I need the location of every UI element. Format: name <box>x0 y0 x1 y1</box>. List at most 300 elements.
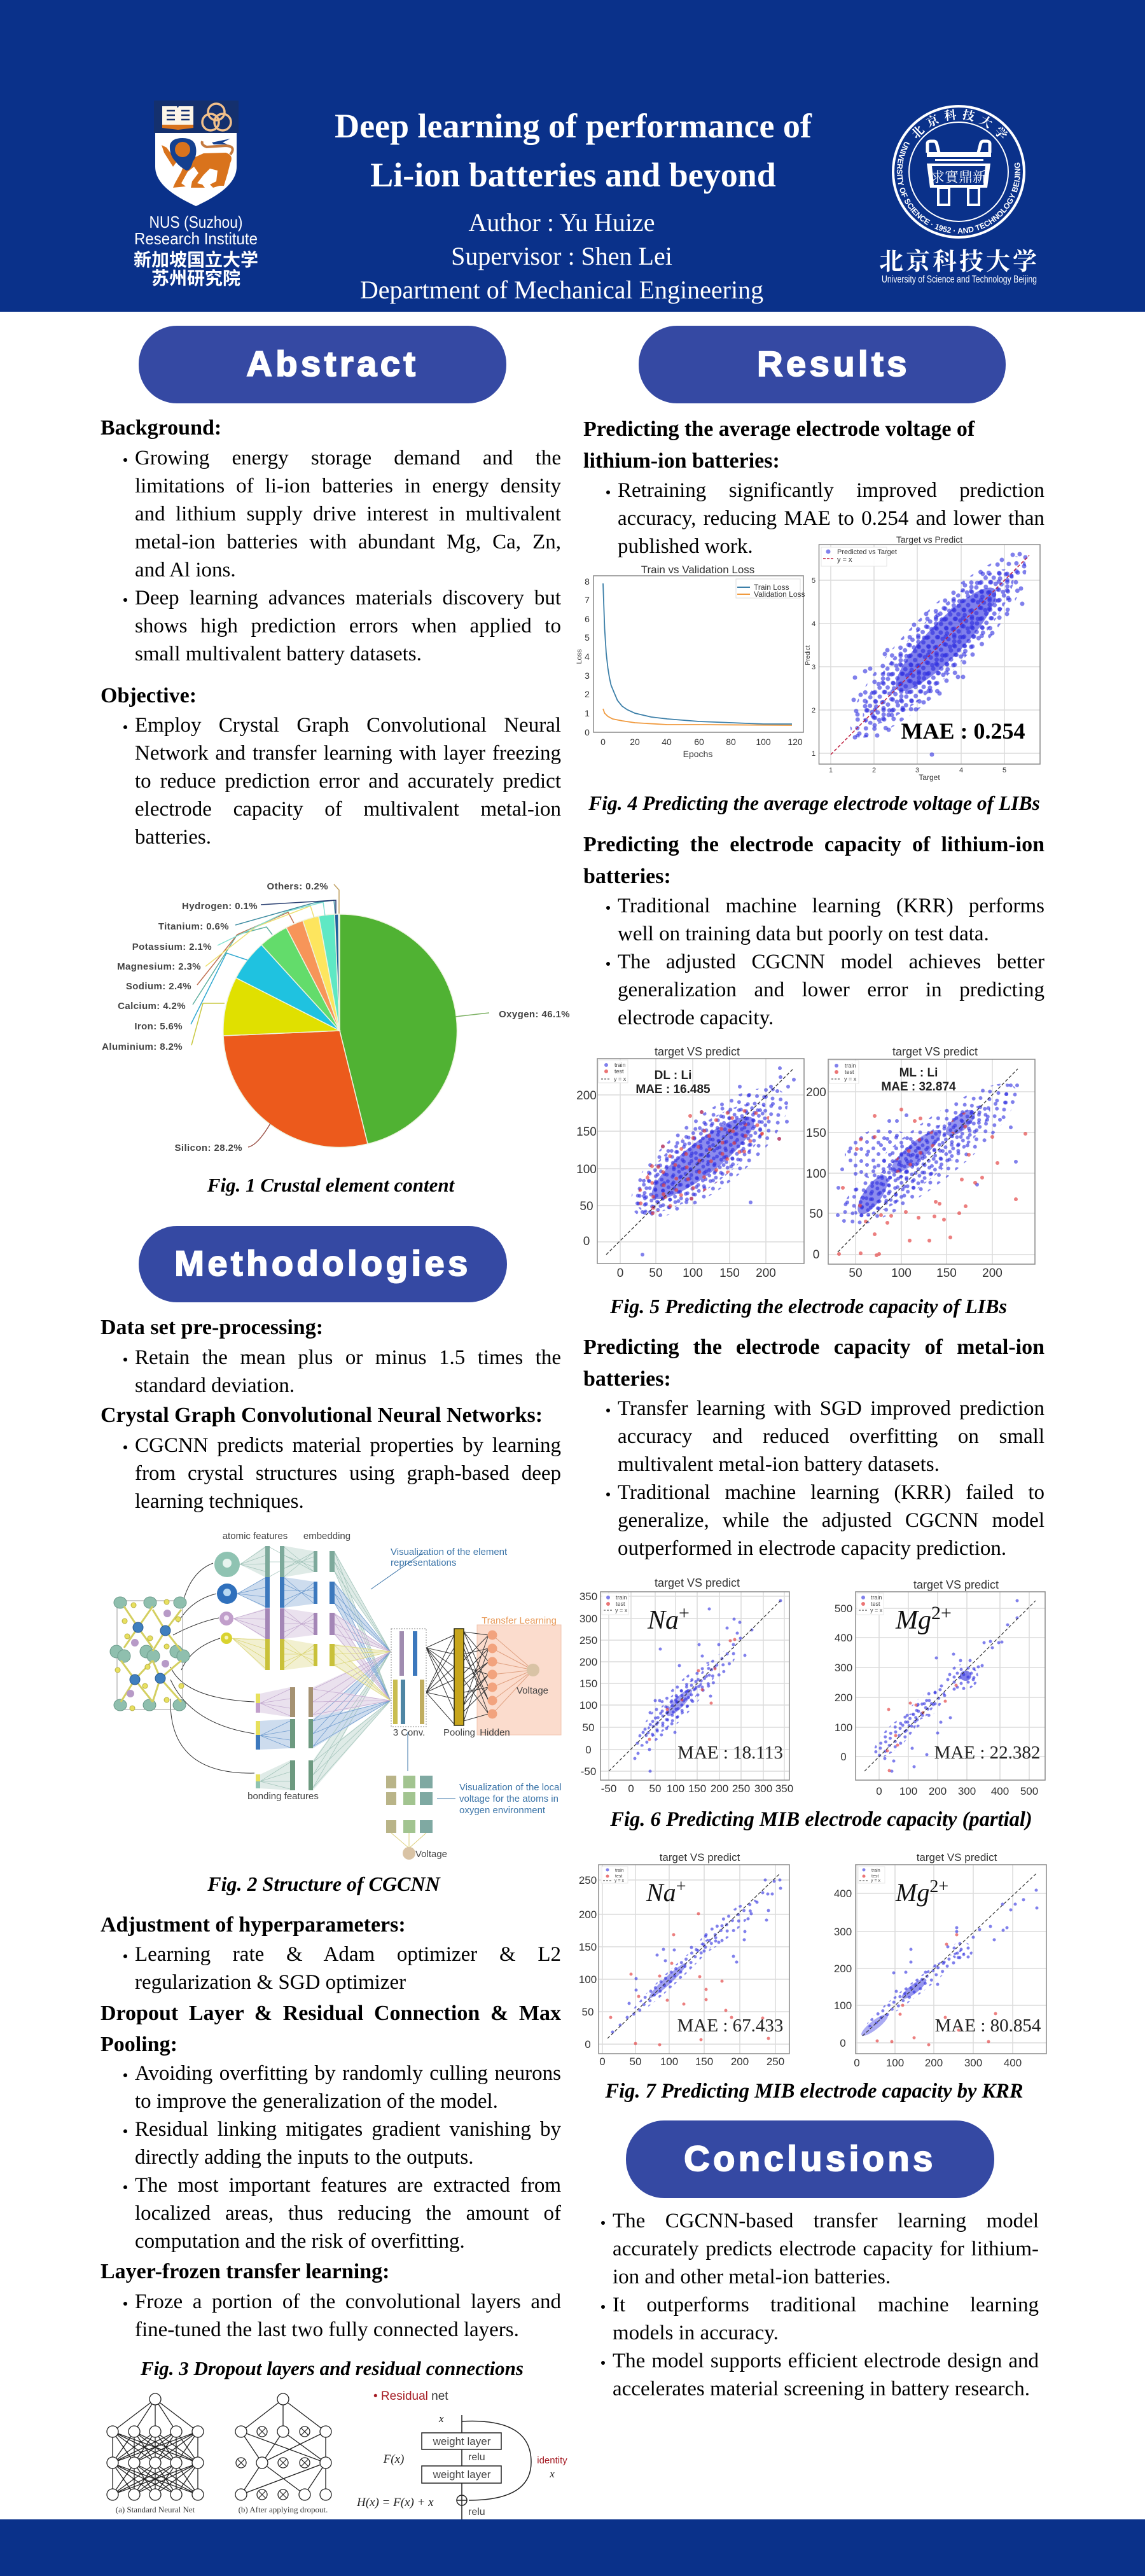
scatter chart: Mg2+: 500 <box>1020 1785 1038 1797</box>
USTB seal logo: 北京科技大学 <box>912 108 1008 139</box>
heading: conclusions: Conclusions <box>684 2138 936 2178</box>
scatter chart: DL Li: target VS predict <box>655 1045 740 1058</box>
USTB seal logo <box>892 105 1025 239</box>
scatter chart: DL Li <box>576 1045 807 1280</box>
diagram: CGCNN structure: bonding features <box>247 1791 319 1802</box>
line chart: train vs validation loss: 120 <box>788 737 803 747</box>
scatter chart: ML Li: 100 <box>891 1267 912 1280</box>
text: hyperparameters bullet: Learning rate & Adam optimizer & L2 <box>135 1943 561 1966</box>
text: capacity LIB bullets <box>618 892 1044 1032</box>
scatter chart: DL Li: test <box>614 1068 624 1075</box>
scatter chart: DL Li: 0 <box>583 1235 590 1248</box>
text: capacity MIB bullets: generalize, while the adjusted CGCNN model <box>618 1509 1044 1532</box>
diagram: CGCNN structure: oxygen environment <box>459 1805 546 1816</box>
scatter chart: DL Li: 200 <box>576 1089 597 1103</box>
text: conclusions bullets: models in accuracy. <box>613 2322 779 2344</box>
scatter chart: Mg2+: 400 <box>835 1632 852 1644</box>
text: conclusions bullets: accurately predicts electrode capacity for lithium- <box>613 2238 1039 2260</box>
diagram: CGCNN structure: Transfer Learning <box>482 1615 557 1626</box>
NUS institute name: NUS (Suzhou) <box>149 212 243 232</box>
scatter chart: ML Li: y = x <box>844 1076 857 1082</box>
line chart: train vs validation loss: 3 <box>585 671 590 681</box>
scatter chart: target vs predict, MAE 0.254: MAE : 0.254 <box>901 718 1025 744</box>
diagram: dropout and residual net: weight layer <box>433 2468 491 2481</box>
charts: fig 5 <box>572 1043 1056 1279</box>
scatter chart: Mg2+: 100 <box>899 1785 917 1797</box>
diagram: CGCNN structure: Voltage <box>517 1685 548 1696</box>
line chart: train vs validation loss: 40 <box>662 737 672 747</box>
title: Deep learning of performance of <box>335 107 812 145</box>
scatter chart: DL Li: 50 <box>649 1267 663 1280</box>
text: capacity LIB bullets: electrode capacity. <box>618 1006 774 1029</box>
title: Li-ion batteries and beyond <box>370 156 776 194</box>
text: pre-processing bullet: standard deviation. <box>135 1374 295 1397</box>
scatter chart: ML Li: ML : Li <box>899 1066 938 1080</box>
scatter chart: DL Li: 200 <box>756 1267 776 1280</box>
scatter chart: Na+: 150 <box>688 1783 706 1795</box>
diagram: dropout and residual net: x <box>549 2468 555 2480</box>
scatter chart: Na+: y = x <box>615 1607 628 1613</box>
pie chart: crustal element content: Magnesium: 2.3% <box>117 961 201 972</box>
text: dropout bullets: directly adding the inputs to the outputs. <box>135 2146 474 2169</box>
scatter chart: Mg2+: 400 <box>991 1785 1009 1797</box>
scatter chart: Na+: 350 <box>775 1783 793 1795</box>
pie chart: crustal element content <box>101 882 572 1155</box>
scatter chart: Mg2+: MAE : 22.382 <box>934 1743 1040 1763</box>
scatter chart: KRR Na+: 150 <box>695 2056 713 2068</box>
author block: Department of Mechanical Engineering <box>360 275 763 304</box>
scatter chart: ML Li: 100 <box>806 1167 826 1181</box>
text: transfer learning bullet: fine-tuned the last two fully connected layers. <box>135 2318 519 2341</box>
scatter chart: target vs predict, MAE 0.254: 1 <box>829 767 833 774</box>
scatter chart: KRR Na+: y = x <box>614 1879 624 1883</box>
text: background bullets: limitations of li-ion batteries in energy density <box>135 475 561 498</box>
NUS institute name: Research Institute <box>134 229 258 248</box>
panel: conclusions <box>572 2099 1056 2418</box>
scatter chart: Mg2+: 0 <box>840 1751 847 1763</box>
header band <box>0 0 1145 312</box>
scatter chart: Na+: 200 <box>579 1656 597 1668</box>
pie chart: crustal element content: Oxygen: 46.1% <box>499 1009 570 1020</box>
scatter chart: Mg2+: test <box>871 1601 880 1607</box>
scatter chart: Na+: target VS predict <box>655 1577 740 1589</box>
line chart: train vs validation loss: 8 <box>585 576 590 587</box>
text: background bullets: metal-ion batteries with abundant Mg, Ca, Zn, <box>135 531 561 553</box>
text: hyperparameters bullet: regularization & SGD optimizer <box>135 1971 406 1994</box>
pie chart: crustal element content: Sodium: 2.4% <box>126 981 191 992</box>
text: transfer learning bullet: Froze a portion of the convolutional layers and <box>135 2290 561 2313</box>
panel: methodologies <box>95 1209 572 2519</box>
caption: fig 3: Fig. 3 Dropout layers and residual connections <box>141 2357 524 2379</box>
subheading: electrode capacity LIB: batteries: <box>583 865 671 888</box>
text: hyperparameters bullet <box>135 1940 561 1996</box>
text: background bullets: and Al ions. <box>135 559 236 581</box>
scatter chart: ML Li: 200 <box>982 1267 1003 1280</box>
footer band <box>0 2519 1145 2576</box>
text: objective bullets: Employ Crystal Graph Convolutional Neural <box>135 714 561 737</box>
diagram: CGCNN structure <box>101 1527 572 1867</box>
text: background bullets: Deep learning advances materials discovery but <box>135 587 561 609</box>
scatter chart: Na+: -50 <box>601 1783 616 1795</box>
scatter chart: Na+: 150 <box>579 1678 597 1690</box>
charts: fig 7 <box>572 1848 1056 2068</box>
scatter chart: KRR Na+: 100 <box>660 2056 678 2068</box>
text: objective bullets: Network and transfer learning with layer freezing <box>135 742 561 765</box>
scatter chart: KRR Mg2+: 0 <box>840 2037 846 2049</box>
text: capacity MIB bullets: outperformed in electrode capacity prediction. <box>618 1537 1006 1560</box>
scatter chart: Mg2+: train <box>871 1594 882 1601</box>
scatter chart: KRR Na+: 50 <box>582 2006 593 2018</box>
text: background bullets: Growing energy storage demand and the <box>135 447 561 470</box>
subheading: electrode capacity MIB: batteries: <box>583 1367 671 1391</box>
text: capacity LIB bullets: Traditional machine learning (KRR) performs <box>618 895 1044 917</box>
pie chart: crustal element content: Calcium: 4.2% <box>118 1001 186 1012</box>
text: background bullets: small multivalent battery datasets. <box>135 643 422 665</box>
diagram: CGCNN structure: embedding <box>303 1531 350 1542</box>
line chart: train vs validation loss: 1 <box>585 708 590 718</box>
text: background bullets: shows high prediction errors when applied to <box>135 615 561 637</box>
caption: fig 1: Fig. 1 Crustal element content <box>207 1174 454 1196</box>
subheading: electrode voltage <box>583 414 975 477</box>
scatter chart: ML Li <box>806 1045 1035 1280</box>
scatter chart: KRR Na+: + <box>676 1877 686 1897</box>
text: capacity MIB bullets: accuracy and reduced overfitting on small <box>618 1425 1044 1448</box>
subheading: data set pre-processing: Data set pre-processing: <box>101 1316 323 1339</box>
text: voltage bullet: Retraining significantly improved prediction <box>618 479 1044 502</box>
subheading: background: Background: <box>101 416 221 440</box>
heading: results <box>639 326 1006 403</box>
scatter chart: Na+: MAE : 18.113 <box>677 1743 783 1763</box>
panel: abstract <box>95 318 572 1209</box>
author block: Author : Yu Huize <box>469 208 655 237</box>
scatter chart: KRR Na+: test <box>615 1874 622 1879</box>
line chart: train vs validation loss: 60 <box>694 737 704 747</box>
scatter chart: KRR Na+: train <box>615 1869 624 1873</box>
panel: results <box>572 318 1056 2099</box>
heading: conclusions <box>626 2120 994 2198</box>
text: capacity LIB bullets: well on training data but poorly on test data. <box>618 922 989 945</box>
NUS institute name <box>134 212 258 288</box>
scatter chart: Na+: 100 <box>667 1783 684 1795</box>
text: dropout bullets: localized areas, thus reducing the amount of <box>135 2202 561 2225</box>
scatter chart: ML Li: train <box>845 1062 856 1069</box>
line chart: train vs validation loss: Epochs <box>683 749 712 759</box>
text: objective bullets: batteries. <box>135 826 211 849</box>
scatter chart: ML Li: 50 <box>849 1267 863 1280</box>
line chart: train vs validation loss: Loss <box>576 649 583 664</box>
scatter chart: KRR Mg2+: test <box>871 1874 878 1879</box>
diagram: dropout and residual net: (b) After applying dropout. <box>239 2505 328 2514</box>
scatter chart: Na+: 350 <box>579 1591 597 1603</box>
subheading: objective: Objective: <box>101 684 197 707</box>
scatter chart: KRR Na+: MAE : 67.433 <box>677 2016 783 2036</box>
scatter chart: DL Li: 0 <box>617 1267 623 1280</box>
scatter chart: Na+: 300 <box>579 1613 597 1625</box>
diagram: CGCNN structure: voltage for the atoms in <box>459 1793 559 1804</box>
caption: fig 7: Fig. 7 Predicting MIB electrode capacity by KRR <box>605 2080 1024 2103</box>
scatter chart: Na+: 50 <box>649 1783 661 1795</box>
diagram: CGCNN structure: representations <box>391 1557 456 1568</box>
text: background bullets <box>135 444 561 668</box>
scatter chart: Mg2+: target VS predict <box>913 1578 999 1591</box>
scatter chart: KRR Na+: Na <box>646 1878 676 1907</box>
text: dropout bullets: Residual linking mitigates gradient vanishing by <box>135 2118 561 2141</box>
line chart: train vs validation loss: 20 <box>630 737 640 747</box>
text: objective bullets: to reduce prediction error and accurately predict <box>135 770 561 793</box>
scatter chart: target vs predict, MAE 0.254: Target vs Predict <box>896 534 962 545</box>
scatter chart: KRR Mg2+: target VS predict <box>917 1851 997 1863</box>
scatter chart: Na+: 0 <box>585 1744 592 1756</box>
line chart: train vs validation loss: 6 <box>585 614 590 624</box>
USTB name: 北京科技大学 <box>879 249 1039 275</box>
scatter chart: KRR Mg2+: 300 <box>834 1926 852 1938</box>
scatter chart: KRR Mg2+: 0 <box>854 2057 860 2069</box>
text: voltage bullet <box>618 477 1044 560</box>
scatter chart: KRR Na+: target VS predict <box>660 1851 740 1863</box>
scatter chart: ML Li: 150 <box>806 1127 826 1140</box>
line chart: train vs validation loss: 100 <box>756 737 771 747</box>
scatter chart: Mg2+: 300 <box>835 1662 852 1674</box>
subheading: dropout: Pooling: <box>101 2033 177 2056</box>
scatter chart: Mg2+: Mg <box>896 1606 931 1635</box>
text: voltage bullet: accuracy, reducing MAE to 0.254 and lower than <box>618 507 1044 530</box>
diagram: CGCNN structure: Hidden <box>480 1727 510 1738</box>
scatter chart: target vs predict, MAE 0.254: 4 <box>812 620 815 628</box>
pie chart: crustal element content: Titanium: 0.6% <box>158 921 229 932</box>
caption: fig 4: Fig. 4 Predicting the average electrode voltage of LIBs <box>588 792 1040 814</box>
diagram: dropout and residual net: identity <box>537 2455 567 2466</box>
scatter chart: KRR Mg2+: 300 <box>964 2057 982 2069</box>
heading: methodologies <box>139 1226 507 1302</box>
scatter chart: KRR Mg2+: y = x <box>871 1879 880 1883</box>
scatter chart: DL Li: 100 <box>576 1163 597 1176</box>
line chart: train vs validation loss: Train Loss <box>754 583 789 592</box>
line chart: train vs validation loss: 80 <box>726 737 736 747</box>
scatter chart: target vs predict, MAE 0.254: Target <box>919 773 940 782</box>
subheading: hyperparameters: Adjustment of hyperparameters: <box>101 1913 406 1937</box>
scatter chart: Na+: 0 <box>628 1783 634 1795</box>
diagram: dropout and residual net: H(x) = F(x) + x <box>356 2496 434 2509</box>
scatter chart: target vs predict, MAE 0.254: 1 <box>812 750 815 758</box>
scatter chart: Mg2+ <box>835 1578 1045 1797</box>
caption: fig 2: Fig. 2 Structure of CGCNN <box>207 1872 440 1895</box>
scatter chart: KRR Mg2+ <box>834 1851 1046 2069</box>
scatter chart: Na+: 100 <box>579 1699 597 1711</box>
text: dropout bullets: computation and the risk of overfitting. <box>135 2230 465 2253</box>
text: capacity LIB bullets: The adjusted CGCNN model achieves better <box>618 950 1044 973</box>
scatter chart: Na+: train <box>616 1594 627 1601</box>
text: dropout bullets: The most important features are extracted from <box>135 2174 561 2197</box>
text: conclusions bullets: The model supports efficient electrode design and <box>613 2350 1039 2372</box>
scatter chart: target vs predict, MAE 0.254: 2 <box>812 707 815 714</box>
subheading: electrode capacity LIB <box>583 829 1044 893</box>
scatter chart: KRR Mg2+: 200 <box>925 2057 943 2069</box>
heading: abstract: Abstract <box>246 344 419 383</box>
diagram: dropout and residual net: relu <box>468 2507 485 2517</box>
scatter chart: ML Li: 0 <box>813 1248 819 1262</box>
text: dropout bullets <box>135 2059 561 2255</box>
scatter chart: ML Li: 50 <box>809 1208 823 1221</box>
diagram: CGCNN structure: Visualization of the local <box>459 1782 562 1793</box>
text: pre-processing bullet: Retain the mean plus or minus 1.5 times the <box>135 1346 561 1369</box>
subheading: electrode capacity MIB <box>583 1332 1044 1395</box>
title <box>255 102 891 200</box>
text: objective bullets: electrode capacity of multivalent metal-ion <box>135 798 561 821</box>
scatter chart: Na+: + <box>679 1603 690 1624</box>
scatter chart: Na+: 200 <box>711 1783 728 1795</box>
scatter chart: KRR Mg2+: MAE : 80.854 <box>935 2016 1041 2036</box>
USTB seal logo: UNIVERSITY OF SCIENCE · 1952 · AND TECHNOLOGY BEIJING <box>897 142 1020 234</box>
scatter chart: KRR Mg2+: 100 <box>886 2057 904 2069</box>
scatter chart: DL Li: y = x <box>614 1076 627 1082</box>
scatter chart: KRR Mg2+: 100 <box>834 2000 852 2012</box>
scatter chart: DL Li: train <box>614 1062 626 1068</box>
scatter chart: DL Li: 100 <box>683 1267 703 1280</box>
subheading: dropout <box>101 1998 561 2060</box>
line chart: train vs validation loss: 4 <box>585 651 590 662</box>
scatter chart: target vs predict, MAE 0.254: Predict <box>805 645 812 665</box>
scatter chart: KRR Na+ <box>579 1851 789 2068</box>
scatter chart: Na+: 250 <box>732 1783 750 1795</box>
pie chart: crustal element content: Hydrogen: 0.1% <box>182 901 258 912</box>
scatter chart: Na+: 50 <box>583 1722 594 1734</box>
scatter chart: ML Li: test <box>845 1069 854 1075</box>
diagram: dropout and residual net: • Residual net <box>373 2390 448 2403</box>
scatter chart: Na+: -50 <box>581 1765 596 1778</box>
scatter chart: target vs predict, MAE 0.254: 5 <box>1003 767 1006 774</box>
scatter chart: target vs predict, MAE 0.254: 4 <box>959 767 963 774</box>
text: dropout bullets: to improve the generalization of the model. <box>135 2090 498 2113</box>
scatter chart: KRR Na+: 50 <box>630 2056 641 2068</box>
text: capacity MIB bullets: Transfer learning with SGD improved prediction <box>618 1397 1044 1420</box>
text: conclusions bullets: The CGCNN-based transfer learning model <box>613 2210 1039 2232</box>
heading: abstract <box>139 326 506 403</box>
line chart: train vs validation loss: 0 <box>600 737 606 747</box>
scatter chart: ML Li: 200 <box>806 1086 826 1099</box>
charts: fig 6 <box>572 1575 1056 1800</box>
text: CGCNN bullet <box>135 1431 561 1515</box>
scatter chart: target vs predict, MAE 0.254: Predicted vs Target <box>837 548 897 556</box>
line chart: train vs validation loss: Validation Loss <box>754 590 805 599</box>
scatter chart: DL Li: 50 <box>579 1200 593 1213</box>
scatter chart: Mg2+: 500 <box>835 1603 852 1615</box>
scatter chart: KRR Mg2+: train <box>871 1869 880 1873</box>
scatter chart: ML Li: MAE : 32.874 <box>881 1080 956 1094</box>
text: conclusions bullets <box>613 2207 1039 2403</box>
scatter chart: Na+: 300 <box>754 1783 772 1795</box>
scatter chart: KRR Mg2+: Mg <box>896 1878 929 1907</box>
scatter chart: Na+: Na <box>648 1606 679 1635</box>
scatter chart: Na+ <box>579 1577 793 1795</box>
USTB name: University of Science and Technology Beijing <box>882 274 1037 285</box>
USTB seal logo: 求實鼎新 <box>931 169 987 185</box>
caption: fig 6: Fig. 6 Predicting MIB electrode capacity (partial) <box>610 1808 1032 1831</box>
scatter chart: target vs predict, MAE 0.254: 3 <box>915 767 919 774</box>
diagram: CGCNN structure: Voltage <box>415 1849 447 1860</box>
subheading: transfer learning: Layer-frozen transfer learning: <box>101 2260 389 2283</box>
scatter chart: DL Li: 150 <box>576 1125 597 1139</box>
scatter chart: Na+: 250 <box>579 1634 597 1647</box>
subheading: electrode voltage: lithium-ion batteries: <box>583 449 780 473</box>
line chart: train vs validation loss <box>576 564 805 759</box>
text: conclusions bullets: ion and other metal-ion batteries. <box>613 2266 891 2288</box>
subheading: electrode voltage: Predicting the average electrode voltage of <box>583 417 975 441</box>
scatter chart: target vs predict, MAE 0.254 <box>805 534 1047 782</box>
subheading: dropout: Dropout Layer & Residual Connection & Max <box>101 2002 561 2025</box>
caption: fig 5: Fig. 5 Predicting the electrode capacity of LIBs <box>610 1295 1007 1318</box>
text: CGCNN bullet: learning techniques. <box>135 1490 304 1513</box>
NUS crest logo <box>134 101 1039 288</box>
scatter chart: KRR Na+: 200 <box>579 1909 597 1921</box>
scatter chart: ML Li: 150 <box>936 1267 957 1280</box>
scatter chart: Mg2+: 100 <box>835 1722 852 1734</box>
line chart: train vs validation loss: 7 <box>585 595 590 605</box>
line chart: train vs validation loss: Train vs Validation Loss <box>641 564 754 576</box>
scatter chart: KRR Na+: 250 <box>767 2056 784 2068</box>
diagram: dropout and residual net: x <box>438 2412 444 2425</box>
diagram: dropout and residual net: relu <box>468 2452 485 2463</box>
scatter chart: KRR Na+: 100 <box>579 1974 597 1986</box>
scatter chart: DL Li: DL : Li <box>655 1069 691 1082</box>
text: capacity MIB bullets: Traditional machine learning (KRR) failed to <box>618 1481 1044 1504</box>
scatter chart: KRR Na+: 250 <box>579 1874 597 1886</box>
diagram: dropout and residual net: (a) Standard Neural Net <box>116 2505 195 2514</box>
subheading: electrode capacity LIB: Predicting the electrode capacity of lithium-ion <box>583 833 1044 856</box>
text: capacity MIB bullets <box>618 1395 1044 1563</box>
scatter chart: KRR Mg2+: 200 <box>834 1963 852 1975</box>
scatter chart: KRR Mg2+: 400 <box>1004 2057 1022 2069</box>
scatter chart: KRR Na+: 200 <box>731 2056 749 2068</box>
scatter chart: KRR Na+: 0 <box>599 2056 606 2068</box>
line chart: train vs validation loss: 5 <box>585 632 590 643</box>
scatter chart: Mg2+: 200 <box>929 1785 947 1797</box>
subheading: electrode capacity MIB: Predicting the electrode capacity of metal-ion <box>583 1335 1044 1359</box>
text: objective bullets <box>135 711 561 851</box>
scatter chart: KRR Mg2+: 2+ <box>929 1877 948 1897</box>
scatter chart: target vs predict, MAE 0.254: 3 <box>812 664 815 671</box>
scatter chart: Mg2+: 200 <box>835 1692 852 1704</box>
text: conclusions bullets: It outperforms traditional machine learning <box>613 2294 1039 2316</box>
author block: Supervisor : Shen Lei <box>451 242 672 270</box>
text: CGCNN bullet: from crystal structures using graph-based deep <box>135 1462 561 1485</box>
scatter chart: Mg2+: 0 <box>876 1785 882 1797</box>
scatter chart: DL Li: 150 <box>719 1267 740 1280</box>
pie chart: crustal element content: Potassium: 2.1% <box>132 942 212 952</box>
scatter chart: target vs predict, MAE 0.254: 2 <box>872 767 876 774</box>
pie chart: crustal element content: Iron: 5.6% <box>134 1021 183 1032</box>
text: background bullets: and lithium supply drive interest in multivalent <box>135 503 561 526</box>
text: capacity LIB bullets: generalization and lower error in predicting <box>618 978 1044 1001</box>
diagram: CGCNN structure: 3 Conv. <box>393 1727 425 1738</box>
heading: results: Results <box>757 344 910 383</box>
diagram: CGCNN structure: atomic features <box>223 1531 288 1542</box>
text: dropout bullets: Avoiding overfitting by randomly culling neurons <box>135 2062 561 2085</box>
pie chart: crustal element content: Aluminium: 8.2% <box>102 1041 183 1052</box>
text: pre-processing bullet <box>135 1344 561 1400</box>
pie chart: crustal element content: Silicon: 28.2% <box>175 1143 242 1153</box>
line chart: train vs validation loss: 2 <box>585 689 590 699</box>
scatter chart: DL Li: MAE : 16.485 <box>635 1083 711 1096</box>
heading: methodologies: Methodologies <box>174 1243 471 1283</box>
pie chart: crustal element content: Others: 0.2% <box>267 881 328 892</box>
scatter chart: target vs predict, MAE 0.254: y = x <box>837 556 852 564</box>
scatter chart: Mg2+: y = x <box>870 1607 883 1613</box>
text: capacity MIB bullets: multivalent metal-ion battery datasets. <box>618 1453 940 1476</box>
text: CGCNN bullet: CGCNN predicts material properties by learning <box>135 1434 561 1457</box>
scatter chart: target vs predict, MAE 0.254: 5 <box>812 577 815 585</box>
diagram: dropout and residual net: weight layer <box>433 2435 491 2447</box>
diagram: CGCNN structure: Visualization of the element <box>391 1547 508 1557</box>
